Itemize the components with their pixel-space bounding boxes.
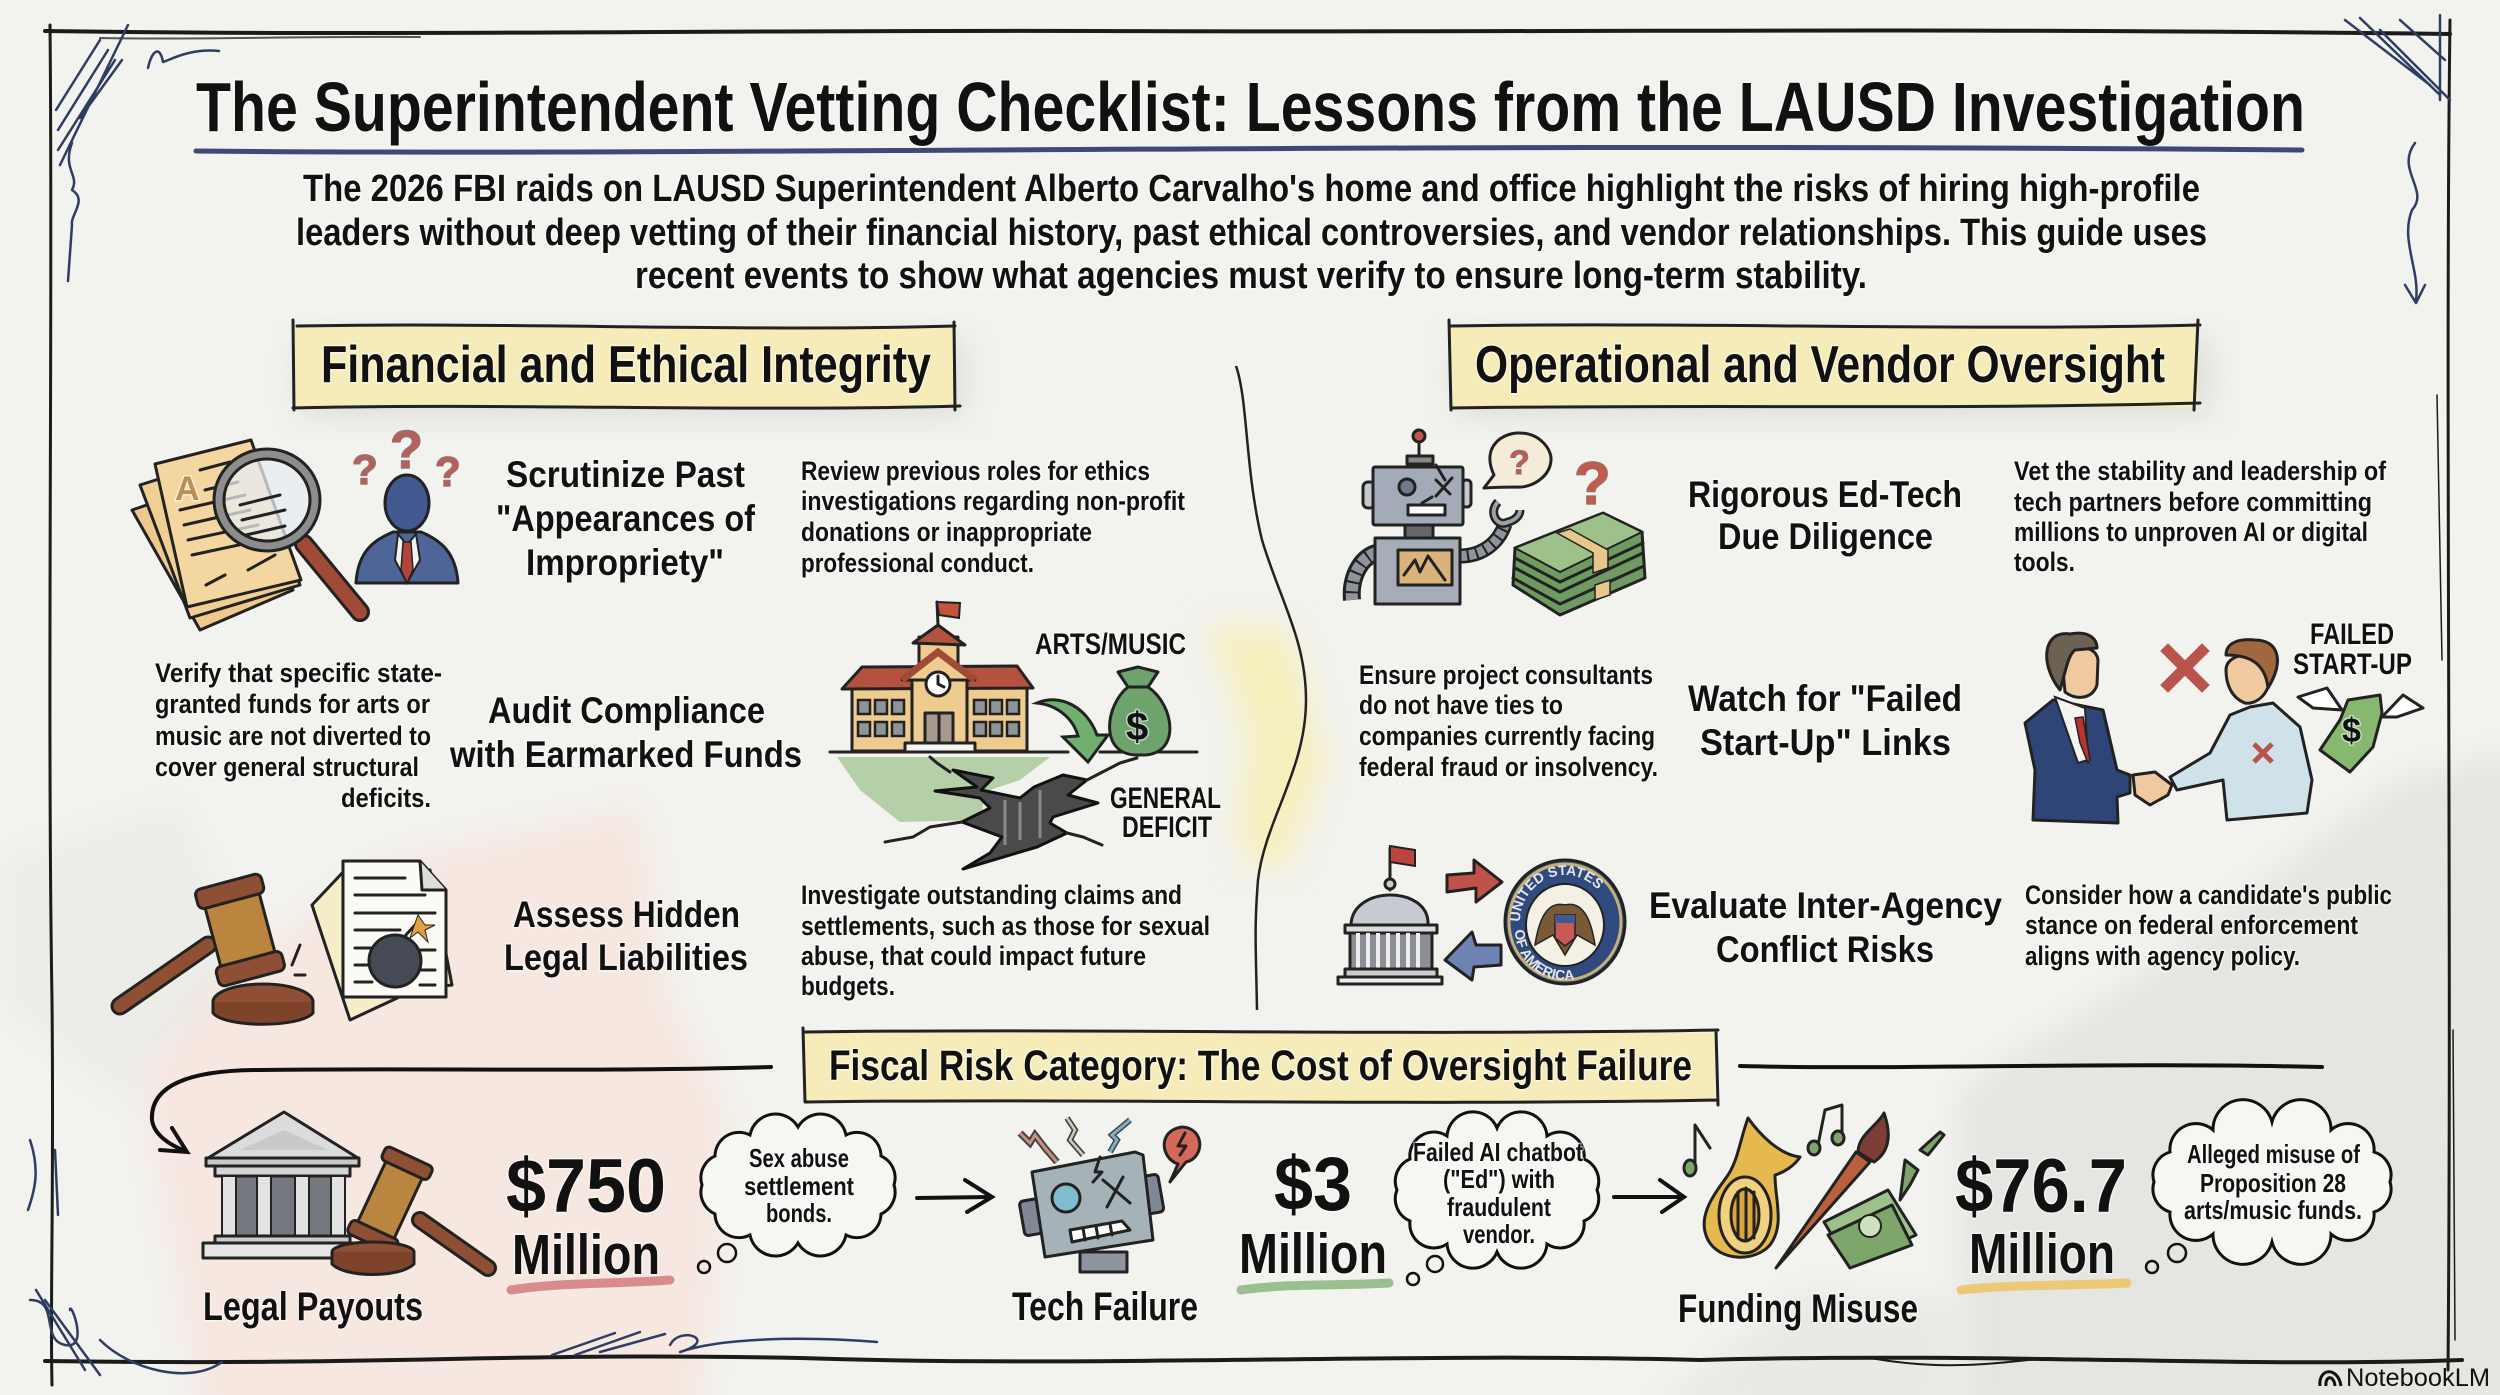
icon: courthouse and gavel [203, 1112, 488, 1274]
callout: Proposition 28 [2200, 1168, 2346, 1198]
heading: financial and ethical integrity: Financial and Ethical Integrity [321, 336, 931, 394]
description: Vet the stability and leadership of [2014, 456, 2387, 486]
item: evaluate inter-agency conflict risks [1336, 844, 2392, 986]
description: tools. [2014, 547, 2075, 577]
heading [1649, 885, 2002, 970]
callout: Alleged misuse of [2187, 1139, 2360, 1169]
item: audit compliance [155, 602, 1221, 869]
label: Funding Misuse [1678, 1287, 1918, 1331]
description: federal fraud or insolvency. [1359, 752, 1658, 782]
callout: vendor. [1463, 1219, 1535, 1249]
label: general deficit: GENERAL [1110, 782, 1221, 815]
label: arts/music: ARTS/MUSIC [1035, 628, 1186, 661]
heading: Impropriety" [526, 542, 724, 583]
icon: school, arrow, money bag, crack [830, 602, 1197, 869]
heading: Rigorous Ed-Tech [1688, 474, 1962, 515]
heading [1688, 678, 1962, 763]
amount: $3 [1274, 1142, 1352, 1227]
description: Ensure project consultants [1359, 660, 1653, 690]
description: Verify that specific state- [155, 658, 442, 688]
icon: faceless person with question marks: ? [435, 448, 461, 495]
heading: Evaluate Inter-Agency [1649, 885, 2002, 926]
arrow [917, 1180, 992, 1212]
icon: broken robot with money: ? [1574, 450, 1611, 517]
description: settlements, such as those for sexual [801, 911, 1210, 941]
intro text: leaders without deep vetting of their financial history, past ethical controversies, and vendor relationships. This guide uses [296, 212, 2207, 254]
heading: operational and vendor oversight: Operational and Vendor Oversight [1475, 336, 2165, 394]
description [2014, 456, 2387, 577]
description: stance on federal enforcement [2025, 910, 2358, 940]
line right of fiscal heading [1740, 1065, 2322, 1067]
description [801, 880, 1210, 1001]
heading: operational and vendor oversight [1449, 320, 2210, 416]
item: scrutinize past [132, 420, 1185, 630]
fiscal: legal payouts [203, 1112, 895, 1329]
heading [504, 894, 748, 978]
fiscal: tech failure [1012, 1112, 1599, 1329]
icon: broken robot head [1019, 1118, 1200, 1272]
description: do not have ties to [1359, 690, 1563, 720]
description: aligns with agency policy. [2025, 941, 2300, 971]
heading: Conflict Risks [1716, 929, 1934, 970]
fiscal: funding misuse [1678, 1100, 2391, 1331]
description: professional conduct. [801, 548, 1034, 578]
description: abuse, that could impact future [801, 941, 1146, 971]
heading: Legal Liabilities [504, 937, 748, 978]
heading: financial and ethical integrity [293, 320, 965, 416]
description [2025, 880, 2392, 971]
description: Investigate outstanding claims and [801, 880, 1182, 910]
callout: bonds. [766, 1198, 832, 1228]
amount: $750 [506, 1144, 666, 1229]
heading: Watch for "Failed [1688, 678, 1962, 719]
description [801, 456, 1185, 578]
label: failed start-up: START-UP [2293, 648, 2412, 681]
heading: Due Diligence [1718, 516, 1933, 557]
connector: heading to legal payouts [152, 1067, 771, 1152]
icon: capitol, arrows, seal: OF AMERICA [1515, 930, 1574, 980]
icon: tuba, brush, money, notes [1684, 1105, 1944, 1268]
label: Legal Payouts [203, 1285, 423, 1329]
intro text [296, 168, 2207, 297]
description: donations or inappropriate [801, 517, 1092, 547]
callout: Sex abuse [749, 1143, 849, 1173]
description: Consider how a candidate's public [2025, 880, 2392, 910]
callout: arts/music funds. [2184, 1195, 2362, 1225]
icon: handshake with failed start-up [2025, 633, 2423, 823]
heading: Scrutinize Past [506, 454, 745, 495]
item: rigorous ed-tech [1352, 430, 2387, 615]
icon: capitol, arrows, seal [1336, 844, 1626, 986]
amount: Million [512, 1223, 660, 1287]
description: Review previous roles for ethics [801, 456, 1150, 486]
icon: faceless person with question marks [352, 420, 461, 583]
label: failed start-up: FAILED [2310, 618, 2394, 651]
icon: broken robot with money: ? [1509, 444, 1530, 482]
callout [2146, 1100, 2391, 1273]
heading: fiscal risk category [803, 1028, 1718, 1105]
label: general deficit [1110, 782, 1221, 844]
heading [449, 690, 802, 775]
description [1359, 660, 1658, 782]
icon: handshake with failed start-up: $ [2342, 712, 2361, 750]
label: general deficit: DEFICIT [1122, 811, 1212, 844]
amount: $76.7 [1955, 1144, 2127, 1229]
callout: fraudulent [1447, 1192, 1551, 1222]
amount: Million [1239, 1222, 1387, 1286]
callout [1395, 1112, 1599, 1285]
description: companies currently facing [1359, 721, 1655, 751]
heading: with Earmarked Funds [449, 734, 802, 775]
notebooklm logo: NotebookLM [2346, 1364, 2490, 1392]
icon: broken robot with money [1352, 430, 1645, 615]
heading: fiscal risk category: Fiscal Risk Category: The Cost of Oversight Failure [829, 1042, 1692, 1090]
label: Tech Failure [1012, 1285, 1198, 1329]
callout [698, 1114, 895, 1273]
item: assess hidden legal liabilities [120, 861, 1210, 1024]
heading: Start-Up" Links [1700, 722, 1951, 763]
description: music are not diverted to [155, 721, 431, 751]
heading: Audit Compliance [488, 690, 765, 731]
item: watch for failed start-up links [1359, 618, 2423, 823]
heading [1688, 474, 1962, 557]
callout: ("Ed") with [1443, 1164, 1555, 1194]
amount: Million [1969, 1222, 2115, 1286]
heading [496, 454, 756, 583]
title underline [196, 147, 2302, 152]
intro text: recent events to show what agencies must verify to ensure long-term stability. [635, 255, 1867, 297]
icon: documents and magnifier [132, 440, 360, 630]
callout: Failed AI chatbot [1413, 1137, 1583, 1167]
icon: school, arrow, money bag, crack: $ [1126, 705, 1148, 749]
arrow [1614, 1180, 1684, 1212]
description: deficits. [341, 783, 431, 813]
callout: settlement [744, 1171, 854, 1201]
heading: Assess Hidden [513, 894, 740, 935]
icon: faceless person with question marks: ? [352, 446, 378, 493]
description: budgets. [801, 971, 895, 1001]
description: tech partners before committing [2014, 487, 2372, 517]
amount [1239, 1142, 1389, 1290]
description: cover general structural [155, 752, 419, 782]
center divider [1236, 366, 1306, 1010]
description: investigations regarding non-profit [801, 486, 1185, 516]
label: failed start-up [2293, 618, 2412, 681]
intro text: The 2026 FBI raids on LAUSD Superintendent Alberto Carvalho's home and office highlight the risks of hiring high-profile [303, 168, 2200, 210]
heading: "Appearances of [496, 498, 756, 539]
icon: capitol, arrows, seal: UNITED STATES [1510, 865, 1603, 921]
description [155, 658, 442, 813]
icon: documents and magnifier: A [175, 470, 200, 508]
icon: gavel and bomb document [120, 861, 452, 1024]
description: millions to unproven AI or digital [2014, 517, 2368, 547]
amount [1955, 1144, 2127, 1290]
description: granted funds for arts or [155, 689, 430, 719]
amount [506, 1144, 670, 1290]
icon: faceless person with question marks: ? [390, 420, 423, 480]
